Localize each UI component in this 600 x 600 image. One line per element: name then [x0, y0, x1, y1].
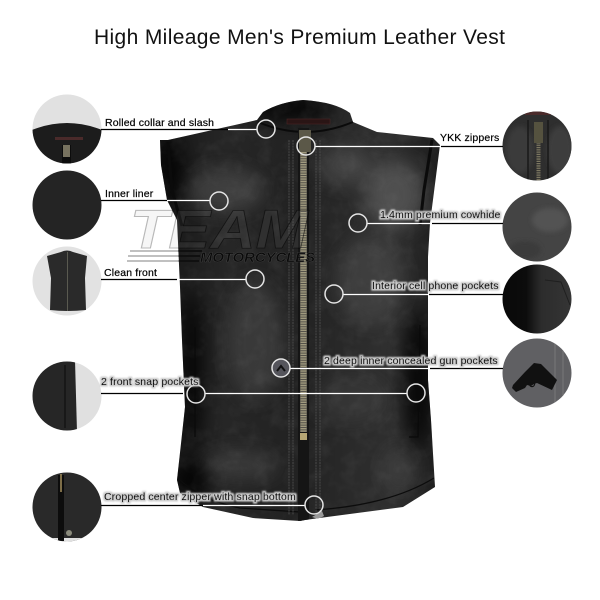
callout line: ykk zippers [297, 137, 503, 155]
armhole seams [168, 140, 432, 226]
detail circle: center zipper [32, 472, 102, 542]
bottom hem [178, 478, 434, 512]
center dark placket [298, 128, 309, 523]
callout line: clean front [101, 270, 264, 288]
pocket slits [195, 325, 420, 437]
label: ykk zippers: YKK zippers [440, 132, 499, 144]
detail circle: cowhide [502, 192, 572, 262]
callout line: snap pockets [101, 384, 425, 403]
detail circle: collar [32, 94, 102, 164]
title: High Mileage Men's Premium Leather Vest [94, 26, 505, 49]
zipper pull [299, 130, 311, 152]
label: snap pockets: 2 front snap pockets [101, 376, 199, 388]
label: inner liner: Inner liner [105, 188, 154, 200]
detail circle: gun pockets [502, 338, 572, 408]
detail circle: ykk zipper [502, 112, 572, 180]
label: rolled collar: Rolled collar and slash [105, 117, 214, 129]
label: center zipper: Cropped center zipper with snap bottom [104, 491, 296, 503]
callout line: gun pockets [272, 359, 503, 377]
callout line: inner liner [101, 192, 228, 210]
zipper teeth [300, 152, 306, 432]
collar and neck seam [258, 122, 353, 132]
callout line: cowhide [349, 214, 503, 232]
zipper tape [300, 152, 307, 432]
detail circle: clean front [32, 246, 102, 316]
leather texture [177, 105, 434, 492]
collar tag [287, 119, 330, 124]
label: phone pockets: Interior cell phone pockets [372, 280, 499, 292]
vest illustration [160, 100, 440, 521]
callout line: center zipper [101, 496, 323, 514]
snap corner highlight [312, 511, 324, 519]
zipper stop [300, 433, 307, 440]
logo faint overlay: TEAM [130, 198, 309, 260]
label: gun pockets: 2 deep inner concealed gun pockets [324, 355, 498, 367]
callout line: rolled collar [101, 120, 275, 138]
label: cowhide: 1.4mm premium cowhide [380, 209, 500, 221]
callout line: phone pockets [325, 285, 503, 303]
detail circle: inner liner [32, 170, 102, 240]
front placket stitching [289, 140, 320, 515]
label: clean front: Clean front [104, 267, 157, 279]
detail circle: phone pockets [502, 264, 572, 334]
logo subtitle: MOTORCYCLES [200, 249, 316, 265]
icon: pistol [512, 363, 557, 392]
watermark: team motorcycles logo: TEAM [130, 198, 309, 260]
detail circle: snap pockets [32, 362, 102, 430]
